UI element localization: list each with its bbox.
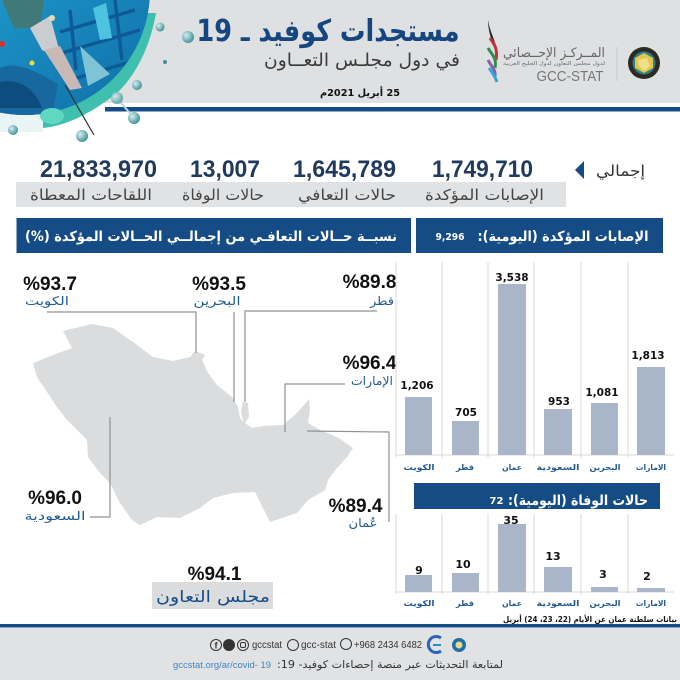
footer band [0, 624, 680, 680]
GCC emblem [628, 47, 660, 79]
panel heading: daily confirmed: 9,296 [436, 232, 465, 243]
label: Oman: عُمان [348, 516, 378, 530]
label: Saudi Arabia [24, 488, 86, 524]
stat: confirmed: 1,749,710 [432, 156, 533, 183]
GCC-STAT logo [488, 20, 618, 85]
label: Qatar: %89.8 [343, 272, 396, 293]
bar chart: daily deaths: عمان [502, 599, 522, 608]
totals label with arrow: إجمالي [596, 162, 645, 181]
label: Bahrain: %93.5 [192, 274, 246, 295]
panel heading: daily deaths [414, 483, 660, 509]
label: Bahrain [192, 274, 246, 309]
subtitle: في دول مجلـس التعــاون [264, 50, 460, 71]
GCC map [33, 324, 353, 525]
panel heading: daily confirmed [416, 218, 663, 253]
stat: deaths: 13,007 [190, 156, 260, 183]
bar chart: daily confirmed cases: 1,081 [585, 387, 619, 399]
stat: vaccinations: اللقاحات المعطاة [30, 186, 152, 204]
panel heading: daily deaths: حالات الوفاة (اليومية): [508, 493, 648, 509]
label: Kuwait: الكويت [25, 294, 69, 309]
stat: confirmed [425, 156, 544, 204]
label: Bahrain: البحرين [194, 294, 240, 309]
panel heading: recovery rate: نسبــة حــالات التعافـي من إجمالــي الحــالات المؤكدة (%) [25, 229, 397, 245]
footer social icons and contacts [210, 636, 466, 652]
header image: virus and syringe circle [0, 0, 194, 142]
GCC-STAT logo: GCC-STAT [536, 68, 604, 85]
date: 25 أبريل 2021م [320, 86, 400, 99]
label: Kuwait [23, 274, 77, 309]
bar chart: daily deaths: قطر [455, 599, 474, 608]
GCC-STAT logo: لدول مجلس التعاون لدول الخليج العربية [503, 61, 606, 67]
stat: vaccinations [30, 156, 157, 204]
label: Oman [329, 496, 383, 530]
label: Saudi Arabia: %96.0 [28, 488, 82, 509]
stat: vaccinations: 21,833,970 [40, 156, 157, 183]
bar chart: daily confirmed cases [396, 262, 674, 472]
bar chart: daily confirmed cases: 3,538 [495, 272, 529, 284]
bar chart: daily confirmed cases: 953 [548, 396, 570, 408]
stat: confirmed: الإصابات المؤكدة [425, 186, 544, 204]
bar chart: daily deaths: 3 [599, 568, 607, 581]
label: GCC total: مجلس التعاون [156, 587, 270, 607]
bar chart: daily confirmed cases: قطر [455, 463, 474, 472]
bar chart: daily deaths: 35 [503, 514, 519, 527]
bar chart: daily confirmed cases: 1,206 [400, 380, 434, 392]
label: Kuwait: %93.7 [23, 274, 77, 295]
panel heading: recovery rate [16, 218, 411, 253]
footer social icons and contacts: f [214, 640, 218, 650]
bar chart: daily confirmed cases: الامارات [636, 463, 666, 472]
stat: recoveries: 1,645,789 [293, 156, 396, 183]
bar chart: daily deaths [396, 514, 674, 608]
header band [0, 0, 680, 140]
bar chart: daily confirmed cases: السعودية [536, 463, 580, 472]
stat: recoveries: حالات التعافي [298, 186, 396, 205]
bar chart: daily confirmed cases: 705 [455, 407, 477, 419]
bar chart: daily deaths: السعودية [536, 599, 580, 608]
bar chart: daily deaths: الكويت [404, 599, 435, 608]
label: GCC total: %94.1 [188, 564, 242, 585]
stat: deaths: حالات الوفاة [182, 186, 264, 204]
label: Qatar: قطر [369, 294, 394, 309]
footer link line: لمتابعة التحديثات عبر منصة إحصاءات كوفيد- 19: [277, 659, 503, 671]
label: UAE: الإمارات [351, 374, 393, 389]
bar chart: daily deaths: 13 [545, 550, 561, 563]
totals panel [16, 156, 566, 207]
panel heading: daily confirmed: الإصابات المؤكدة (اليومية): [478, 229, 648, 245]
panel heading: daily deaths: 72 [490, 496, 503, 507]
GCC-STAT logo: المــركـز الإحــصائي [503, 46, 605, 61]
title: مستجدات كوفيد ـ 19 [197, 14, 460, 49]
bar chart: daily confirmed cases: عمان [502, 463, 522, 472]
label: Oman: %89.4 [329, 496, 383, 517]
leader lines [47, 311, 389, 522]
bar chart: daily deaths: البحرين [590, 599, 621, 608]
label: Qatar [343, 272, 396, 309]
bar chart: daily deaths: 10 [455, 558, 471, 571]
footer link line: gccstat.org/ar/covid- 19 [173, 660, 271, 671]
footer social icons and contacts: +968 2434 6482 [354, 640, 422, 651]
bar chart: daily deaths: 9 [415, 564, 423, 577]
stat: deaths [182, 156, 264, 204]
bar chart: daily confirmed cases: البحرين [590, 463, 621, 472]
footer social icons and contacts: gcc-stat [301, 640, 336, 651]
bar chart: daily confirmed cases: الكويت [404, 463, 435, 472]
totals label with arrow [575, 161, 645, 181]
bar chart: daily deaths: 2 [643, 570, 651, 583]
label: UAE [343, 353, 397, 389]
label: UAE: %96.4 [343, 353, 397, 374]
bar chart: daily confirmed cases: 1,813 [631, 350, 665, 362]
stat: recoveries [293, 156, 396, 205]
bar chart: daily deaths: الامارات [636, 599, 666, 608]
footer link line [173, 659, 503, 671]
label: Saudi Arabia: السعودية [24, 509, 86, 524]
label: GCC total [152, 564, 273, 609]
footer social icons and contacts: gccstat [252, 640, 282, 651]
